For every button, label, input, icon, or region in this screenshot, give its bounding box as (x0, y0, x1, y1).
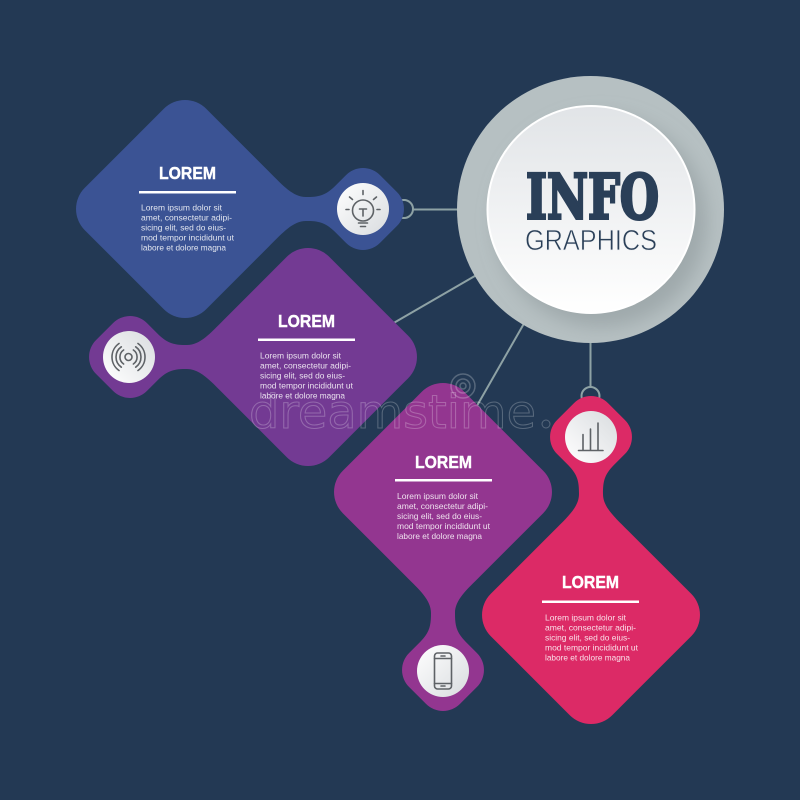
body text: mod tempor incididunt ut (397, 521, 491, 531)
watermark: dreamstime (249, 385, 536, 439)
icon: bar chart (565, 411, 617, 463)
body text: mod tempor incididunt ut (141, 233, 235, 243)
body text: Lorem ipsum dolor sit (397, 491, 479, 501)
heading: LOREM (562, 572, 619, 592)
body text: labore et dolore magna (545, 652, 630, 662)
body text: amet, consectetur adipi- (545, 622, 636, 632)
connector: magenta panel to hub (470, 320, 526, 418)
rule (139, 191, 236, 194)
heading: LOREM (159, 163, 216, 183)
watermark registered mark (542, 420, 550, 428)
body text: sicing elit, sed do eius- (141, 223, 226, 233)
heading: LOREM (415, 452, 472, 472)
connector: blue panel to hub (395, 200, 460, 218)
body text: mod tempor incididunt ut (545, 642, 639, 652)
rule (542, 600, 639, 603)
body text: sicing elit, sed do eius- (397, 511, 482, 521)
rule (395, 479, 492, 482)
central hub (457, 76, 724, 343)
panel: magenta (334, 383, 552, 711)
body text: amet, consectetur adipi- (397, 501, 488, 511)
body text: amet, consectetur adipi- (260, 360, 351, 370)
panel: pink (482, 396, 700, 724)
body text: mod tempor incididunt ut (260, 380, 354, 390)
connector: violet panel to hub (385, 273, 480, 328)
icon: light bulb (337, 183, 389, 235)
watermark spiral (451, 374, 475, 398)
heading: LOREM (278, 311, 335, 331)
body text: labore et dolore magna (141, 243, 226, 253)
body text: labore et dolore magna (397, 531, 482, 541)
subtitle: GRAPHICS: GRAPHICS (525, 225, 657, 257)
connector: pink panel to hub (582, 340, 600, 405)
body text: Lorem ipsum dolor sit (141, 203, 223, 213)
body text (141, 203, 235, 253)
rule (258, 338, 355, 341)
body text: amet, consectetur adipi- (141, 213, 232, 223)
panel: violet (89, 248, 417, 466)
icon: smartphone (417, 645, 469, 697)
body text: sicing elit, sed do eius- (545, 632, 630, 642)
body text (545, 612, 639, 662)
body text (260, 350, 354, 400)
body text: Lorem ipsum dolor sit (545, 612, 627, 622)
body text (397, 491, 491, 541)
body text: sicing elit, sed do eius- (260, 370, 345, 380)
body text: Lorem ipsum dolor sit (260, 350, 342, 360)
body text: labore et dolore magna (260, 390, 345, 400)
title: INFO: INFO (526, 160, 659, 233)
panel: blue (76, 100, 404, 318)
icon: signal waves (103, 331, 155, 383)
